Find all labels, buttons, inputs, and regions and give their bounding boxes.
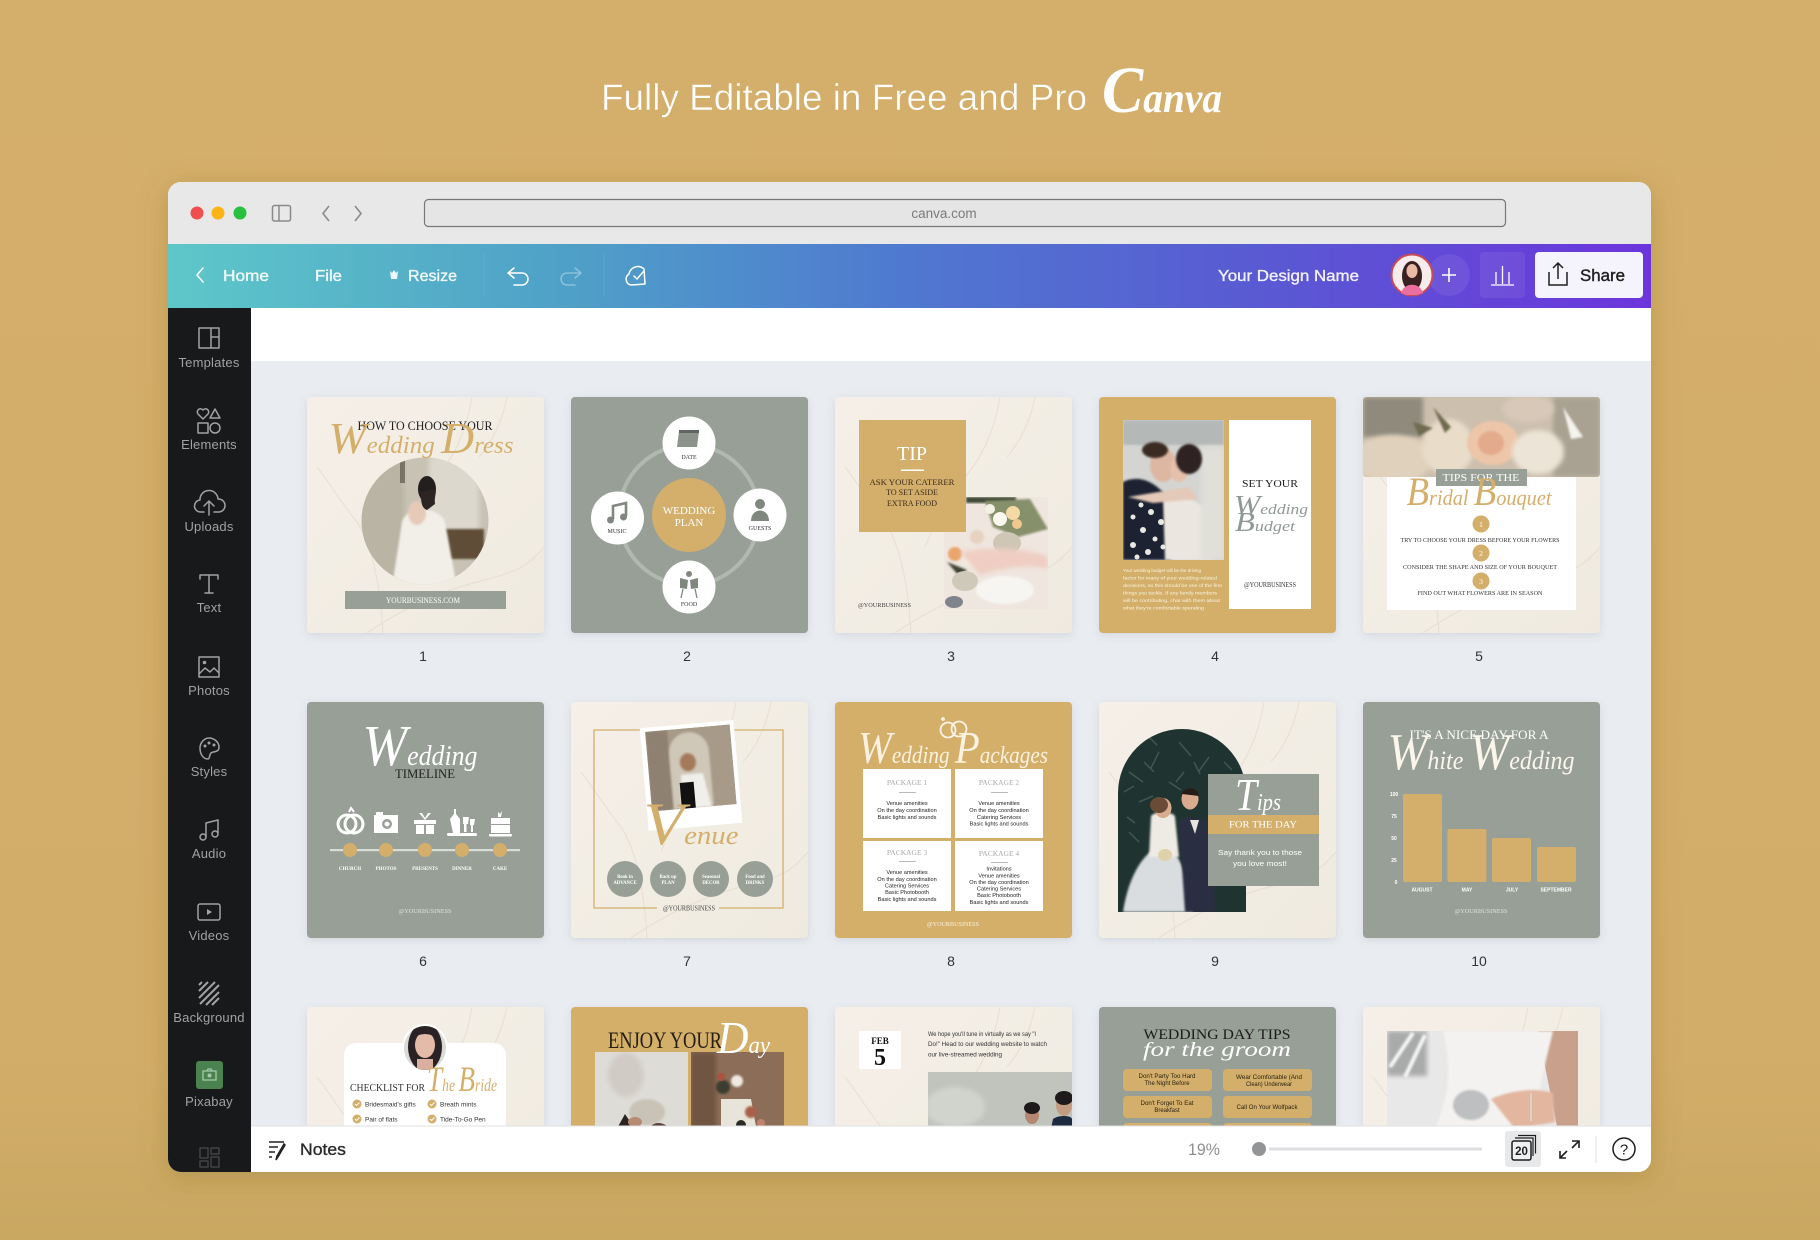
script: tips: Tips [1235,769,1281,820]
timeline line [330,849,520,851]
editor toolbar: Home [223,268,269,285]
package 2: Basic lights and sounds [970,822,1029,828]
package 4 [955,841,1043,911]
script: for the groom: for the groom [1143,1039,1291,1061]
card 14: wedding day tips for the groom [1099,1007,1336,1240]
script: white wedding: White Wedding [1388,724,1574,781]
node: music: MUSIC [607,529,627,535]
bar chart: 0 [1395,880,1398,886]
invitation text: our live-streamed wedding [928,1052,1002,1058]
node: food: FOOD [681,602,698,608]
nav: elements: Elements [181,437,237,452]
node: food [662,560,716,614]
node: guests [734,488,786,542]
invitation text: Do!" Head to our wedding website to watch [928,1042,1047,1048]
tip circle text: DRINKS [746,881,765,886]
node: music [591,492,644,544]
handle: @YOURBUSINESS [858,602,911,609]
nav: more (faded) [200,1148,219,1167]
nav: templates: Templates [178,355,240,370]
invitation text: We hope you'll tune in virtually as we say "I [928,1032,1036,1038]
package 2: On the day coordination [969,808,1029,814]
card 15: bride photo [1363,1007,1600,1240]
package 3: PACKAGE 3 [887,848,927,857]
nav: background [173,982,245,1025]
package 3: On the day coordination [877,877,937,883]
package 1: Venue amenities [886,801,928,807]
package 1 [863,769,951,838]
bar chart: JULY [1506,888,1519,894]
checklist items: Pair of flats [365,1116,398,1124]
card 5: bridal bouquet [1353,395,1600,633]
card 7: venue [571,702,808,938]
photo: veil couple [595,1052,688,1132]
script: wedding packages: Wedding Packages [858,722,1048,773]
tip box 1: Don't Party Too Hard [1138,1074,1196,1080]
nav: styles [191,738,228,779]
bar chart: 50 [1391,836,1397,842]
package 1: On the day coordination [877,808,937,814]
tip box 4: Call On Your Wolfpack [1236,1105,1299,1111]
sidebar [168,308,251,1172]
help button: ? [1620,1142,1628,1158]
package 4: Catering Services [977,886,1021,892]
package 4: Basic Photobooth [977,893,1021,899]
script: bridal bouquet: Bridal Bouquet [1406,469,1552,514]
icon: rings [338,808,363,833]
nav: pixabay [185,1061,233,1109]
card 13: save the date [835,1007,1073,1240]
bar chart: MAY [1462,888,1473,894]
nav: photos [188,657,230,698]
nav: templates [178,328,240,370]
bar chart [1390,792,1576,894]
url text: YOURBUSINESS.COM [386,596,460,605]
nav: pixabay: Pixabay [185,1094,233,1109]
nav: uploads: Uploads [184,519,234,534]
nav: text [197,575,222,615]
package 2 [955,769,1043,838]
white panel [1229,420,1311,609]
gold frame [594,730,783,908]
tip heading: TIP [897,443,927,465]
tip circle text [613,875,765,886]
center circle [652,478,726,552]
page numbers row 2: 9 [1211,953,1219,969]
tip circle text: Back up [660,875,677,880]
heading: Fully Editable in Free and Pro Canva: Canva [1102,54,1222,127]
browser window [168,182,1651,1240]
package 3: Basic lights and sounds [878,897,937,903]
node: date [662,416,716,470]
timeline labels: DINNER [452,867,472,872]
paragraph: factor for many of your wedding-related [1123,576,1217,582]
nav: text: Text [197,600,222,615]
checklist items [352,1100,486,1124]
tips label: TIPS FOR THE [1442,472,1520,484]
timeline labels: PHOTOS [376,867,397,872]
gold band [1208,815,1319,834]
white panel [1387,477,1576,610]
bar chart: 100 [1390,792,1398,798]
nav: videos: Videos [189,928,230,943]
page numbers row 2: 10 [1471,953,1487,969]
checklist heading: CHECKLIST FOR [350,1083,425,1094]
handle: @YOURBUSINESS [1244,580,1296,589]
heading: enjoy your: ENJOY YOUR [608,1028,723,1053]
nav: styles: Styles [191,764,228,779]
tip text: EXTRA FOOD [887,499,937,508]
package 3: Catering Services [885,884,929,890]
photo: bouquet [1353,395,1600,483]
set your text: SET YOUR [1242,478,1299,490]
tip boxes row 3 [1123,1123,1312,1145]
script: wedding budget [1235,496,1308,534]
nav: photos: Photos [188,683,230,698]
page numbers row 1: 4 [1211,648,1219,664]
card 3: tip [835,397,1072,633]
page numbers row 2 [419,953,1487,969]
card 4 content [1123,420,1311,612]
timeline labels: PRESENTS [412,867,438,872]
icon: camera [374,812,398,833]
card 2: wedding plan diagram [571,397,808,633]
checklist items: Tide-To-Go Pen [440,1116,486,1124]
tip box 3: Don't Forget To Eat [1140,1101,1194,1107]
step 1: TRY TO CHOOSE YOUR DRESS BEFORE YOUR FLOWERS [1400,538,1560,544]
card 1: wedding dress [307,397,544,633]
package 2: PACKAGE 2 [979,778,1019,787]
tip box 1: The Night Before [1144,1081,1190,1087]
photo: couple [925,1072,1073,1133]
photo: couple in arch [1118,729,1246,912]
page numbers row 1: 5 [1475,648,1483,664]
tip text: ASK YOUR CATERER [870,478,955,487]
tip box 2: Wear Comfortable (And [1236,1075,1302,1081]
page numbers row 1: 1 [419,648,427,664]
step 2: 2 [1479,549,1483,558]
script: wedding budget: W edding [1234,490,1309,520]
tip box 2: Clean) Underwear [1246,1082,1292,1088]
package 4: Venue amenities [978,874,1020,880]
card 9: tips for the day [1099,702,1336,938]
tip box 3: Breakfast [1154,1108,1180,1114]
panel: template grid [307,395,1600,1240]
package 4: PACKAGE 4 [979,849,1019,858]
script: venue: Venue [644,791,738,857]
script: wedding budget: Budget [1235,507,1296,537]
tips panel [1208,774,1319,886]
for the day: FOR THE DAY [1229,820,1297,830]
tip circle text: PLAN [661,881,675,886]
page count button [1505,1131,1541,1167]
editor toolbar: File [315,268,342,285]
script: wedding: Wedding [362,713,478,778]
page numbers row 2: 8 [947,953,955,969]
package 2: Venue amenities [978,801,1020,807]
bar chart: 25 [1391,858,1397,864]
timeline labels: CAKE [493,867,508,872]
editor toolbar [168,244,1651,308]
card 12: enjoy your day [571,1007,808,1240]
script: wedding dress: Wedding Dress [328,414,514,463]
photo: wedding dress [1387,1031,1578,1132]
page numbers row 1: 2 [683,648,691,664]
heading: WEDDING DAY TIPS [1144,1027,1290,1043]
page count button: 20 [1515,1146,1528,1158]
tip circle text: ADVANCE [613,881,637,886]
tip divider [901,470,924,471]
icon: expand [1560,1141,1579,1158]
package 3: Venue amenities [886,870,928,876]
tip panel [859,420,966,532]
center circle: WEDDING [663,505,715,517]
paragraph [1123,568,1223,612]
browser title bar: canva.com [911,206,977,221]
checklist items: Bridesmaid's gifts [365,1102,416,1108]
zoom slider [1252,1142,1482,1156]
editor toolbar: Your Design Name [1218,268,1359,285]
icon: notes [269,1142,285,1160]
package 2: Catering Services [977,815,1021,821]
nav: videos [189,904,230,943]
bar chart: SEPTEMBER [1540,888,1572,894]
message: you love most! [1233,859,1287,868]
tip circle text: DÉCOR [702,880,720,886]
tips label [1436,469,1527,486]
bar chart: 75 [1391,814,1397,820]
message [1218,848,1302,868]
script: the bride: The Bride [427,1059,497,1099]
timeline title: TIMELINE [395,766,455,781]
page numbers row 1 [419,648,1483,664]
timeline labels: CHURCH [339,867,361,872]
step 2: CONSIDER THE SHAPE AND SIZE OF YOUR BOUQUET [1403,565,1557,571]
date box: FEB [871,1036,889,1046]
tip text [870,480,954,506]
heading: IT'S A NICE DAY FOR A [1410,727,1549,742]
photo: bride [362,458,488,584]
handle: @YOURBUSINESS [927,921,979,928]
paragraph: things you tackle. If any family members [1123,590,1218,596]
white ruler band [251,308,1651,361]
heading: Fully Editable in Free and Pro Canva: Fully Editable in Free and Pro [601,77,1087,118]
browser title bar [168,182,1651,228]
package 4: Invitations [986,866,1012,872]
timeline dots [343,843,507,857]
message: Say thank you to those [1218,848,1302,857]
editor toolbar: Resize [408,268,457,285]
url bar [345,591,506,609]
tip box 1 [1123,1069,1212,1091]
package 3 [863,841,951,911]
card 11: checklist for the bride [307,1007,544,1240]
handle: @YOURBUSINESS [663,904,715,912]
icon: champagne [447,809,477,836]
nav: uploads [184,490,234,534]
icon: gift [414,813,436,834]
photo: table flowers [944,497,1048,609]
package 4: On the day coordination [969,880,1029,886]
tip box 2 [1223,1069,1312,1091]
tip box 4 [1223,1096,1312,1118]
icon: cake [489,811,512,836]
step 2 [1403,544,1557,571]
notes label: Notes [300,1140,346,1159]
card 6: wedding timeline [307,702,544,938]
tip text: TO SET ASIDE [886,488,938,497]
step 3 [1418,572,1543,597]
center circle: PLAN [675,517,703,529]
tip box 3 [1123,1096,1212,1118]
package 1: Basic lights and sounds [878,815,937,821]
tip circle text: Seasonal [702,875,721,880]
package 1: PACKAGE 1 [887,778,927,787]
invitation text [928,1032,1047,1058]
timeline labels [339,867,508,872]
package 3: Basic Photobooth [885,890,929,896]
handle: @YOURBUSINESS [398,908,452,915]
icon: rings [940,718,966,738]
date box [859,1031,901,1071]
help button [1596,1136,1635,1163]
photo: wedding cake [691,1052,784,1132]
card 10: white wedding bar chart [1363,702,1600,938]
browser window shadow [168,182,1651,1172]
handle: @YOURBUSINESS [1454,908,1508,915]
tip circles [607,861,773,897]
nav: audio [192,820,226,861]
page numbers row 2: 7 [683,953,691,969]
step 1 [1400,516,1560,544]
bar chart: AUGUST [1411,888,1433,894]
photo: portrait [402,1023,448,1072]
zoom percent: 19% [1188,1140,1220,1159]
nav: background: Background [173,1010,245,1025]
heading: Fully Editable in Free and Pro Canva [601,54,1222,127]
step 3: 3 [1479,577,1483,586]
node: guests: GUESTS [749,526,771,532]
polaroid [640,720,742,831]
paragraph: Your wedding budget will be the driving [1123,568,1201,574]
nav: audio: Audio [192,846,226,861]
script: day: Day [716,1012,770,1063]
white panel [344,1043,506,1163]
package 4: Basic lights and sounds [970,900,1029,906]
page numbers row 1: 3 [947,648,955,664]
nav: elements [181,409,237,452]
paragraph: what they're comfortable spending [1123,606,1204,612]
tip circle text: Book in [617,875,633,880]
card 8: wedding packages [835,702,1072,938]
editor canvas background [168,182,1651,1172]
card 4: set your wedding budget [1099,397,1336,633]
editor toolbar: Share [1580,266,1625,285]
tip circle text: Food and [745,875,765,880]
checklist items: Breath mints [440,1102,477,1108]
photo: couple embracing [1123,420,1224,560]
page numbers row 2: 6 [419,953,427,969]
bottom bar [251,1126,1651,1172]
step 3: FIND OUT WHAT FLOWERS ARE IN SEASON [1418,591,1543,597]
paragraph: decisions, so this should be one of the first [1123,583,1223,589]
text: how to choose your: HOW TO CHOOSE YOUR [358,418,493,433]
node: date: DATE [681,455,697,461]
ring [619,445,759,585]
paragraph: will be contributing, chat with them about [1123,598,1221,604]
date box: 5 [874,1045,886,1071]
step 1: 1 [1479,520,1483,529]
